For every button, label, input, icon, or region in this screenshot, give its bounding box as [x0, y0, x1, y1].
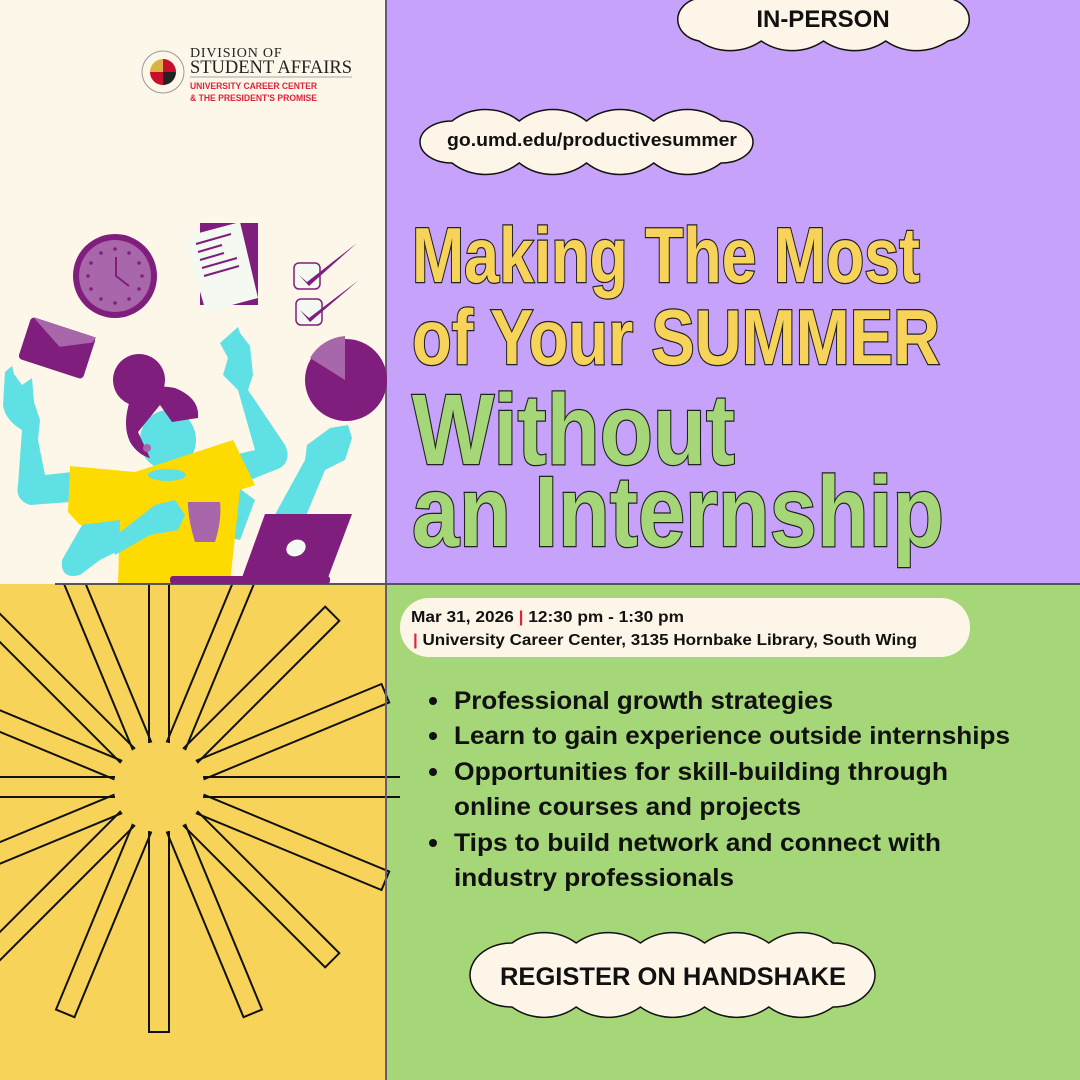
icon: document: [184, 222, 258, 312]
logo: UMD Division of Student Affairs: UNIVERSITY CAREER CENTER: [190, 81, 317, 92]
title: of Your SUMMER: [412, 293, 940, 381]
button: register on handshake: [470, 933, 875, 1017]
woman figure: [3, 327, 352, 576]
mug: [188, 502, 220, 542]
bullet list: industry professionals: [454, 864, 734, 892]
panel: purple top-right: [386, 0, 1080, 584]
logo: UMD Division of Student Affairs: DIVISION OF: [190, 46, 282, 61]
bullet list: Tips to build network and connect with: [454, 829, 941, 857]
badge: IN-PERSON: IN-PERSON: [756, 6, 890, 33]
title: [412, 211, 944, 568]
date and location pill: | University Career Center, 3135 Hornbake Library, South Wing: [413, 632, 917, 649]
date and location pill: [400, 598, 970, 657]
icon: checkboxes: [294, 243, 359, 325]
title: Without: [412, 374, 735, 486]
url badge: go.umd.edu/productivesummer: [447, 130, 737, 150]
icon: clock: [73, 234, 157, 318]
sunburst decoration: [0, 542, 404, 1032]
laptop: [240, 514, 352, 583]
url badge: [420, 110, 753, 174]
panel: yellow bottom-left: [0, 584, 387, 1080]
logo: UMD Division of Student Affairs: STUDENT AFFAIRS: [190, 57, 352, 78]
title: Making The Most: [412, 211, 920, 299]
bullet list: Professional growth strategies: [454, 687, 833, 715]
bullet list: online courses and projects: [454, 793, 801, 821]
button: register on handshake: REGISTER ON HANDSHAKE: [500, 963, 846, 991]
bullet list: Learn to gain experience outside internships: [454, 722, 1010, 750]
logo: UMD Division of Student Affairs: & THE PRESIDENT'S PROMISE: [190, 93, 317, 104]
date and location pill: Mar 31, 2026 | 12:30 pm - 1:30 pm: [411, 609, 684, 626]
logo: UMD Division of Student Affairs: [142, 46, 352, 104]
illustration: woman juggling tasks: [3, 222, 387, 584]
badge: IN-PERSON: [678, 0, 969, 51]
bullet list: [429, 687, 1010, 892]
icon: pie chart: [305, 336, 387, 421]
panel: green bottom-right: [387, 584, 1080, 1080]
title: an Internship: [412, 456, 944, 568]
bullet list: Opportunities for skill-building through: [454, 758, 948, 786]
icon: envelope: [18, 317, 96, 379]
panel: cream top-left: [0, 0, 386, 584]
